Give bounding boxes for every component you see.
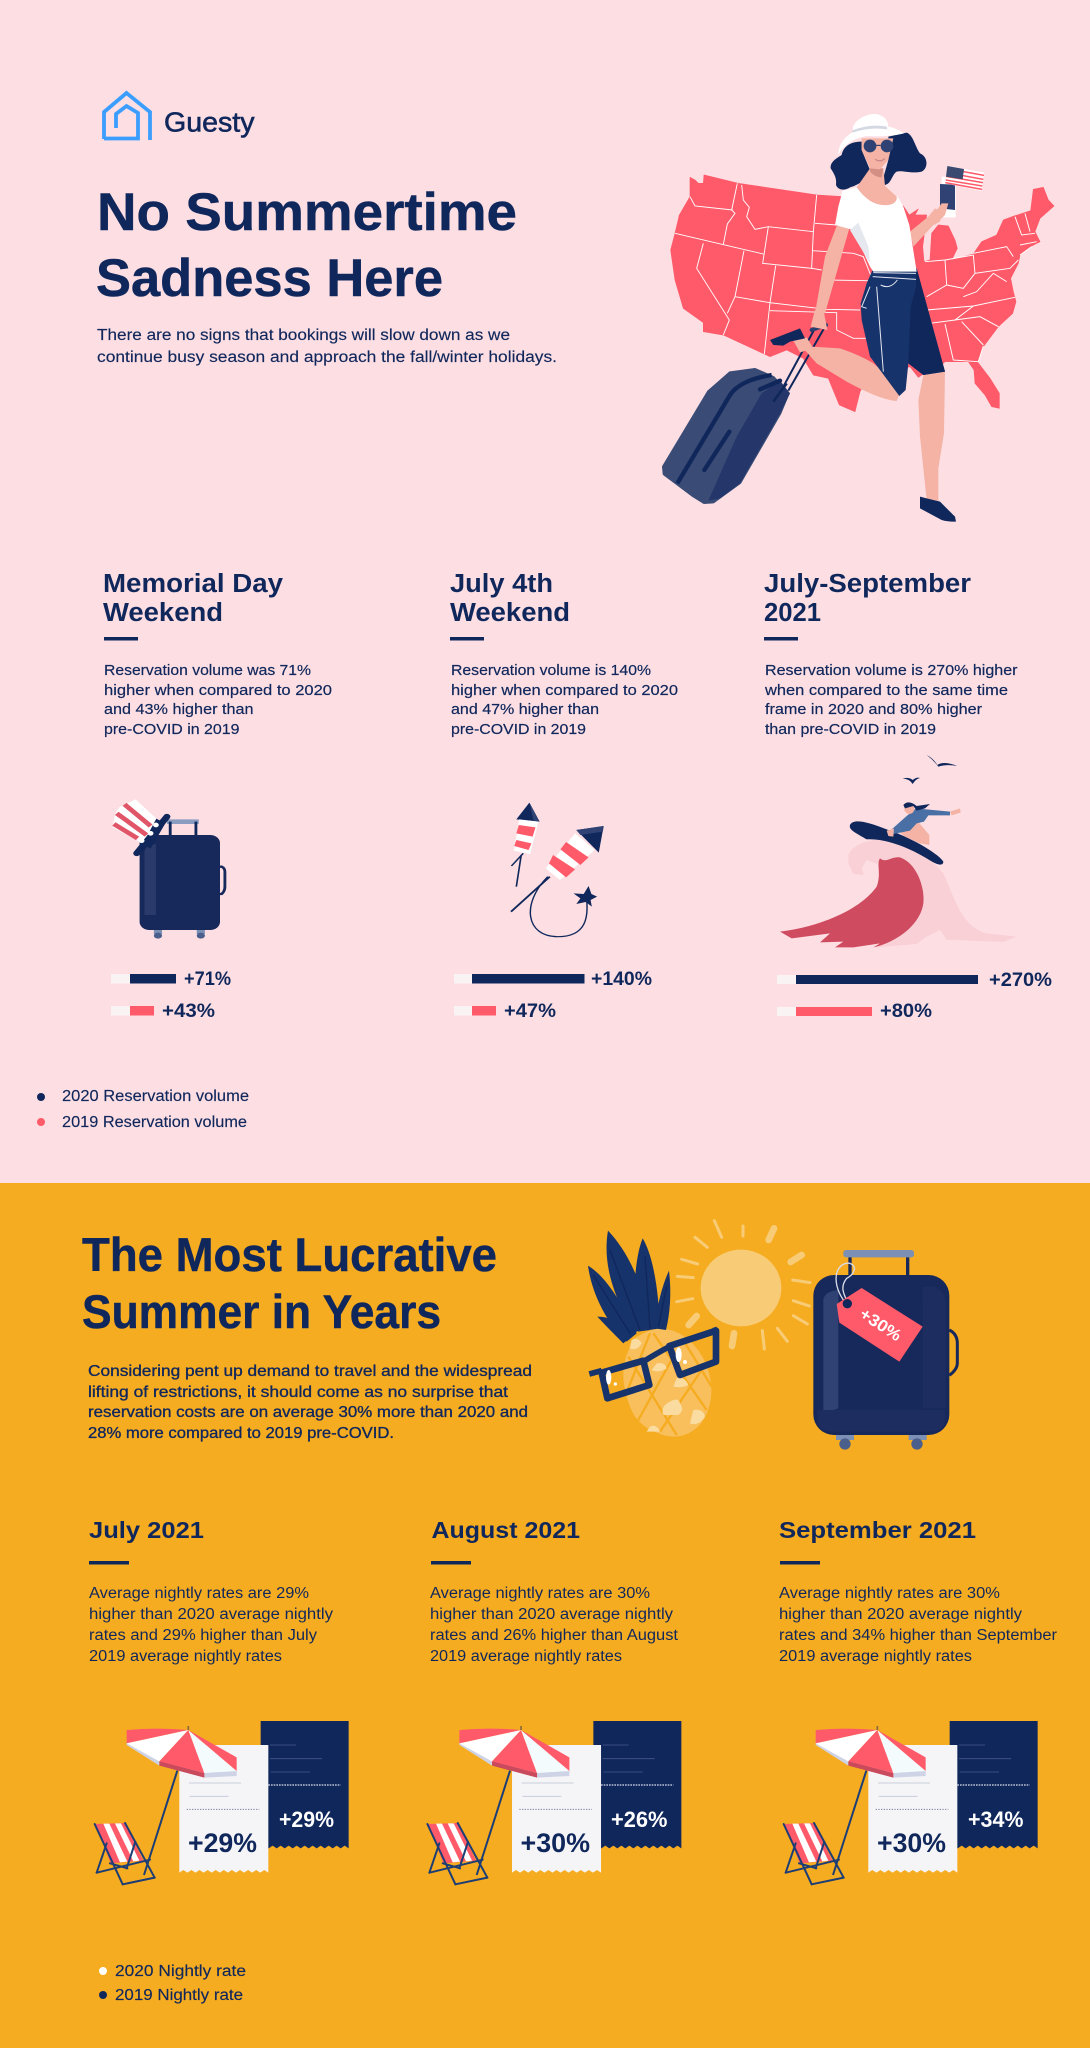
description: Reservation volume is 140% xyxy=(451,662,651,679)
description: higher than 2020 average nightly xyxy=(430,1606,673,1623)
description: 2019 average nightly rates xyxy=(89,1648,282,1665)
panel: September 2021 xyxy=(779,1517,1057,1884)
illustration: beach chair, umbrella and receipts: +30% xyxy=(877,1828,946,1858)
description: frame in 2020 and 80% higher xyxy=(765,701,982,718)
description: higher than 2020 average nightly xyxy=(779,1606,1022,1623)
logo: Guesty xyxy=(104,93,255,140)
heading: July-September xyxy=(764,570,971,598)
illustration: beach chair, umbrella and receipts: +34% xyxy=(968,1807,1024,1832)
description: pre-COVID in 2019 xyxy=(451,721,586,738)
description xyxy=(764,662,1018,738)
title: No Summertime Sadness Here: No Summertime xyxy=(97,183,517,242)
intro text: continue busy season and approach the fall/winter holidays. xyxy=(97,349,557,366)
bar: 2019 +47% xyxy=(454,1000,556,1022)
intro text: lucrative summer xyxy=(88,1363,532,1442)
passport and flag xyxy=(933,166,984,225)
map: United States xyxy=(671,175,1054,412)
title: The Most Lucrative Summer in Years: Summer in Years xyxy=(82,1285,441,1338)
panel: September 2021: September 2021 xyxy=(779,1517,976,1543)
title: No Summertime Sadness Here: Sadness Here xyxy=(96,249,443,308)
description: Reservation volume is 270% higher xyxy=(765,662,1018,679)
bar: 2019 +80%: +80% xyxy=(880,1000,932,1022)
icon: house outline xyxy=(104,93,150,140)
legend: reservation volume: 2020 Reservation volume xyxy=(62,1088,249,1105)
description: 2019 average nightly rates xyxy=(779,1648,972,1665)
description xyxy=(430,1585,679,1665)
icon: surfer on wave xyxy=(780,755,1017,947)
icon: pineapple with glasses xyxy=(588,1231,725,1448)
description: rates and 29% higher than July xyxy=(89,1627,317,1644)
bar: 2020 +270% xyxy=(777,969,1052,991)
heading: July 4th xyxy=(450,570,553,598)
illustration: beach chair, umbrella and receipts: +30% xyxy=(520,1828,590,1858)
description: Average nightly rates are 30% xyxy=(779,1585,1000,1602)
illustration: beach chair, umbrella and receipts: +29% xyxy=(279,1807,334,1832)
legend: nightly rate: 2020 Nightly rate xyxy=(115,1963,246,1980)
description: higher when compared to 2020 xyxy=(451,682,678,699)
background: pink section xyxy=(0,0,1090,1183)
description: higher than 2020 average nightly xyxy=(89,1606,333,1623)
title: The Most Lucrative Summer in Years xyxy=(82,1228,497,1338)
bar: 2020 +140%: +140% xyxy=(591,968,652,990)
intro text: lucrative summer: 28% more compared to 2019 pre-COVID. xyxy=(88,1425,394,1442)
description xyxy=(104,662,332,738)
bar: 2019 +47%: +47% xyxy=(504,1000,556,1022)
heading: Memorial Day xyxy=(103,570,284,598)
description xyxy=(451,662,678,738)
description xyxy=(89,1585,333,1665)
illustration: beach chair, umbrella and receipts xyxy=(784,1721,1038,1884)
heading xyxy=(764,570,971,627)
intro text: lucrative summer: reservation costs are on average 30% more than 2020 and xyxy=(88,1404,528,1421)
heading xyxy=(103,570,284,627)
icon: fireworks xyxy=(511,803,604,937)
icon: suitcase with price tag xyxy=(813,1250,957,1450)
icon: sun xyxy=(677,1221,810,1349)
illustration: beach chair, umbrella and receipts xyxy=(427,1721,681,1884)
description: Average nightly rates are 30% xyxy=(430,1585,650,1602)
illustration: beach chair, umbrella and receipts xyxy=(95,1721,349,1884)
description: rates and 26% higher than August xyxy=(430,1627,679,1644)
legend: nightly rate xyxy=(99,1963,246,2004)
heading xyxy=(450,570,570,627)
panel: August 2021: August 2021 xyxy=(432,1517,580,1543)
panel: July 2021 xyxy=(89,1517,349,1884)
panel: August 2021 xyxy=(427,1517,681,1884)
title: No Summertime Sadness Here xyxy=(96,183,517,308)
logo wordmark: Guesty xyxy=(164,106,255,138)
panel: July 2021: July 2021 xyxy=(89,1517,204,1543)
intro text: lucrative summer: lifting of restrictions, it should come as no surprise that xyxy=(88,1384,509,1401)
description: Average nightly rates are 29% xyxy=(89,1585,309,1602)
description: Reservation volume was 71% xyxy=(104,662,311,679)
title: The Most Lucrative Summer in Years: The Most Lucrative xyxy=(82,1228,497,1281)
description: and 43% higher than xyxy=(104,701,254,718)
intro text xyxy=(97,327,557,366)
description: pre-COVID in 2019 xyxy=(104,721,240,738)
illustration: beach chair, umbrella and receipts: +29% xyxy=(188,1828,257,1858)
illustration: pineapple, sun and suitcase xyxy=(588,1221,957,1450)
description xyxy=(779,1585,1057,1665)
legend: reservation volume: 2019 Reservation volume xyxy=(62,1114,247,1131)
bar: 2020 +71% xyxy=(111,968,231,990)
description: than pre-COVID in 2019 xyxy=(765,721,936,738)
bar: 2019 +80% xyxy=(777,1000,932,1022)
description: higher when compared to 2020 xyxy=(104,682,332,699)
illustration: beach chair, umbrella and receipts: +26% xyxy=(611,1807,668,1832)
legend: reservation volume xyxy=(37,1088,249,1131)
heading: 2021 xyxy=(764,599,821,627)
panel: Memorial Day Weekend xyxy=(103,570,332,1022)
panel: July-September 2021 xyxy=(764,570,1052,1022)
description: 2019 average nightly rates xyxy=(430,1648,622,1665)
description: when compared to the same time xyxy=(764,682,1008,699)
bar: 2019 +43% xyxy=(111,1000,215,1022)
panel: July 4th Weekend xyxy=(450,570,678,1022)
description: rates and 34% higher than September xyxy=(779,1627,1057,1644)
intro text: There are no signs that bookings will slow down as we xyxy=(97,327,510,344)
bar: 2019 +43%: +43% xyxy=(162,1000,215,1022)
description: and 47% higher than xyxy=(451,701,599,718)
woman xyxy=(770,114,956,522)
icon: suitcase with uncle sam hat xyxy=(113,799,225,939)
heading: Weekend xyxy=(450,599,570,627)
icon: suitcase with price tag: +30% xyxy=(856,1304,905,1345)
illustration: woman with suitcase over US map xyxy=(663,114,1054,522)
bar: 2020 +140% xyxy=(454,968,652,990)
legend: nightly rate: 2019 Nightly rate xyxy=(115,1987,243,2004)
bar: 2020 +71%: +71% xyxy=(184,968,231,990)
heading: Weekend xyxy=(103,599,223,627)
background: orange section xyxy=(0,1183,1090,2048)
bar: 2020 +270%: +270% xyxy=(989,969,1052,991)
intro text: lucrative summer: Considering pent up demand to travel and the widespread xyxy=(88,1363,532,1380)
luggage xyxy=(663,325,826,503)
